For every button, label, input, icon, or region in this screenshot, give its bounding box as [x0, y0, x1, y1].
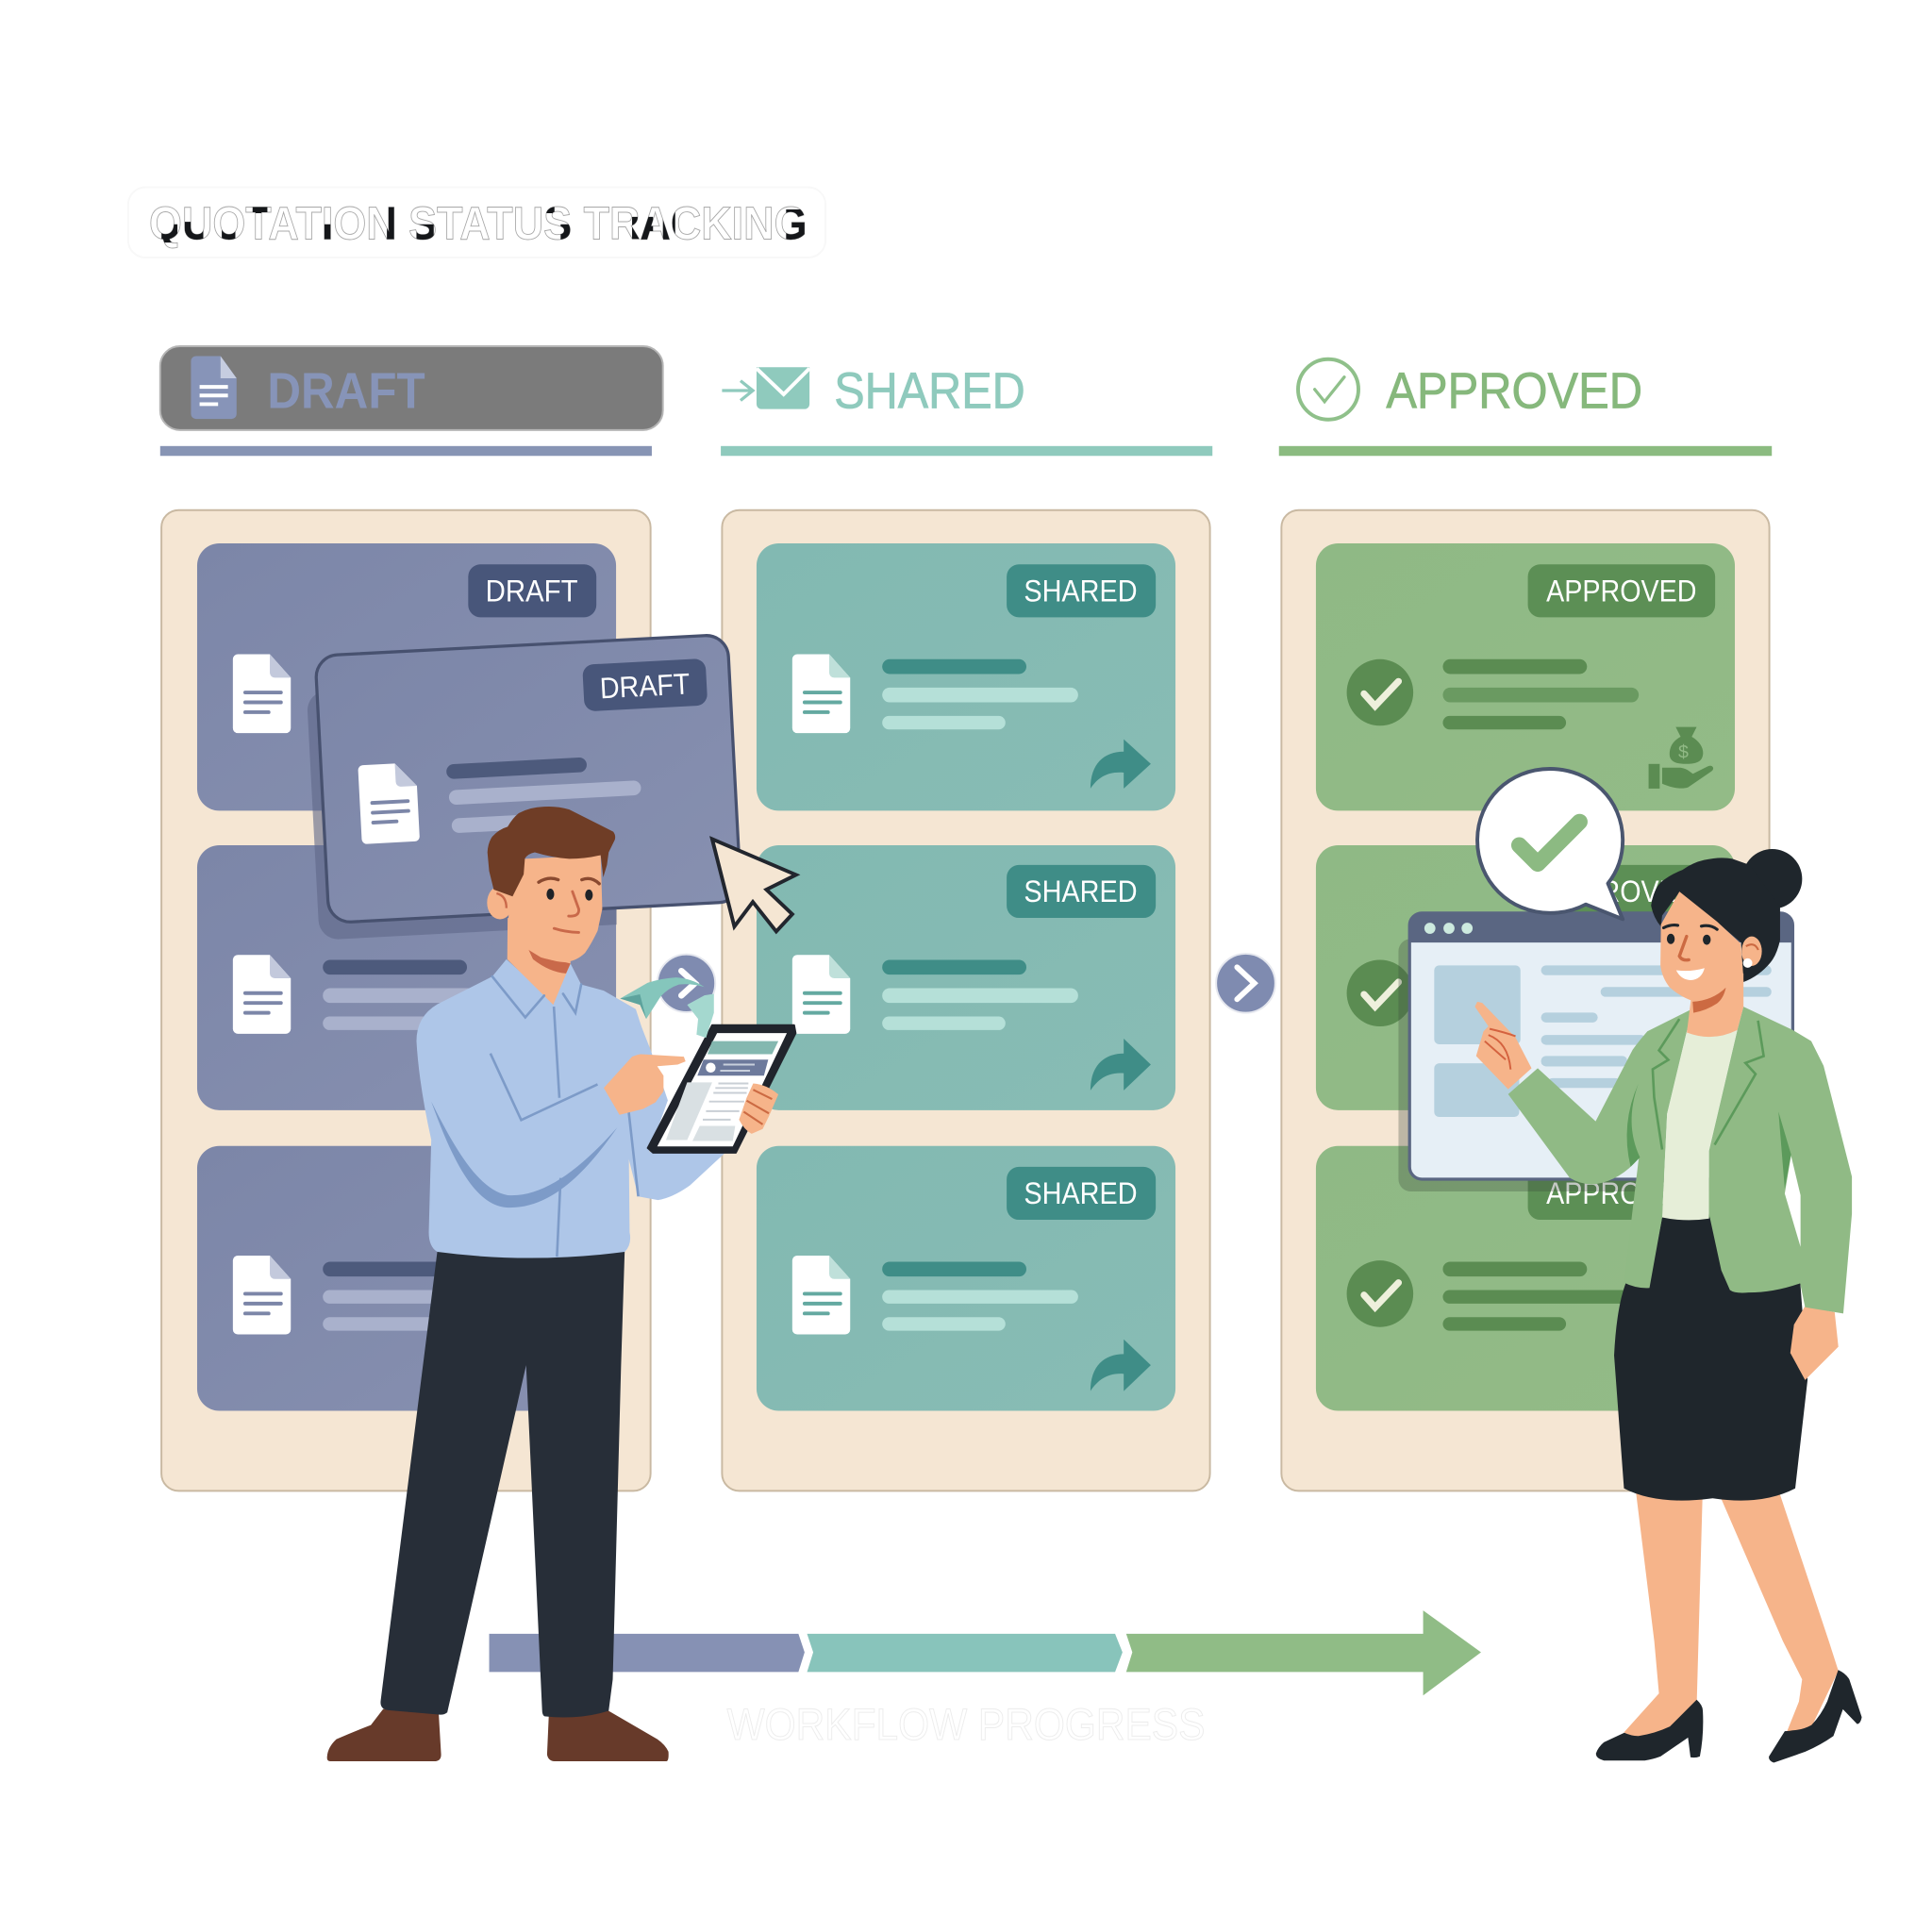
- man with tablet: [327, 807, 795, 1761]
- card: approved 2: [1316, 845, 1735, 1110]
- column header: approved: APPROVED: [1386, 363, 1642, 419]
- card: shared 1: [757, 543, 1175, 810]
- card: approved 2: APPROVED: [1546, 874, 1697, 908]
- arrow: teal swoosh: [620, 977, 714, 1038]
- arrow: connector circle draft to shared: [658, 955, 715, 1012]
- column header: draft: DRAFT: [267, 363, 425, 419]
- floating card shadow: [308, 694, 617, 940]
- man: neck: [508, 918, 571, 1005]
- man: holding hand: [739, 1083, 778, 1134]
- man: facial features: [539, 878, 599, 932]
- column header: shared: SHARED: [834, 363, 1025, 419]
- column header: shared: [721, 363, 1212, 456]
- card: shared 1: SHARED: [1024, 573, 1138, 608]
- column header: draft: [160, 346, 663, 456]
- man: face: [508, 855, 602, 962]
- man: neck shadow: [526, 945, 571, 974]
- man: shirt folds: [431, 1007, 639, 1257]
- browser window: [1398, 913, 1792, 1191]
- progress arrow: [490, 1610, 1481, 1695]
- panel: draft column: [161, 510, 651, 1491]
- title: QUOTATION STATUS TRACKING: [149, 198, 808, 249]
- card: shared 3: [757, 1146, 1175, 1411]
- card: approved 3: APPROVED: [1546, 1175, 1697, 1210]
- woman: jacket gap: [1785, 1156, 1801, 1247]
- floating draft card: DRAFT: [599, 667, 691, 705]
- woman: jacket: [1508, 1007, 1852, 1313]
- card: draft 3: [197, 1146, 616, 1411]
- card: approved 3: [1316, 1146, 1735, 1411]
- card: approved 1: [1316, 543, 1735, 810]
- speech bubble with check: [1477, 769, 1623, 919]
- man: shirt: [416, 959, 651, 1258]
- card: shared 3: SHARED: [1024, 1175, 1138, 1210]
- arrow: connector circle shared to approved: [1216, 954, 1275, 1013]
- panel: approved column: [1281, 510, 1770, 1491]
- woman: skirt: [1614, 1217, 1807, 1501]
- card: approved 1: APPROVED: [1546, 573, 1697, 608]
- panel: shared column: [722, 510, 1210, 1491]
- card: draft 1: DRAFT: [486, 573, 578, 608]
- icon: money bag on hand: [1649, 727, 1713, 789]
- icon: money bag on hand: $: [1678, 741, 1689, 762]
- woman: face: [1660, 891, 1743, 1002]
- card: shared 2: SHARED: [1024, 874, 1138, 908]
- woman presenter: [1474, 849, 1862, 1763]
- icon: draft document: [191, 356, 237, 419]
- man: sleeve behind tablet: [616, 1009, 740, 1200]
- woman: blouse: [1662, 1030, 1738, 1220]
- woman: neck: [1687, 974, 1743, 1037]
- man: trousers: [380, 1251, 625, 1718]
- woman: hair and bun: [1651, 849, 1802, 982]
- woman: facial features: [1664, 925, 1717, 980]
- caption: workflow progress: WORKFLOW PROGRESS: [727, 1699, 1205, 1749]
- man: shoes: [327, 1709, 669, 1761]
- woman: pointing hand: [1474, 1002, 1532, 1090]
- man: ear: [487, 886, 513, 919]
- man: tablet: [648, 1025, 795, 1153]
- woman: jacket details: [1627, 1019, 1791, 1189]
- card: shared 2: [757, 845, 1175, 1110]
- floating draft card: [315, 634, 741, 923]
- card: draft 2: [197, 845, 616, 1110]
- icon: arrow into envelope: [722, 367, 809, 409]
- man: pointing hand: [604, 1055, 686, 1115]
- woman: shoes: [1596, 1670, 1862, 1763]
- man: collar: [492, 976, 581, 1017]
- column header: approved: [1279, 359, 1772, 456]
- woman: right hand: [1790, 1306, 1839, 1380]
- woman: neck shadow: [1692, 988, 1725, 1013]
- woman: legs: [1624, 1485, 1839, 1740]
- title: QUOTATION STATUS TRACKING: [149, 198, 808, 249]
- icon: approved check circle: [1298, 359, 1358, 420]
- card: draft 1: [197, 543, 616, 810]
- icon: mouse cursor: [712, 839, 796, 931]
- woman: ear and earring: [1741, 937, 1762, 968]
- man: hair: [488, 807, 615, 896]
